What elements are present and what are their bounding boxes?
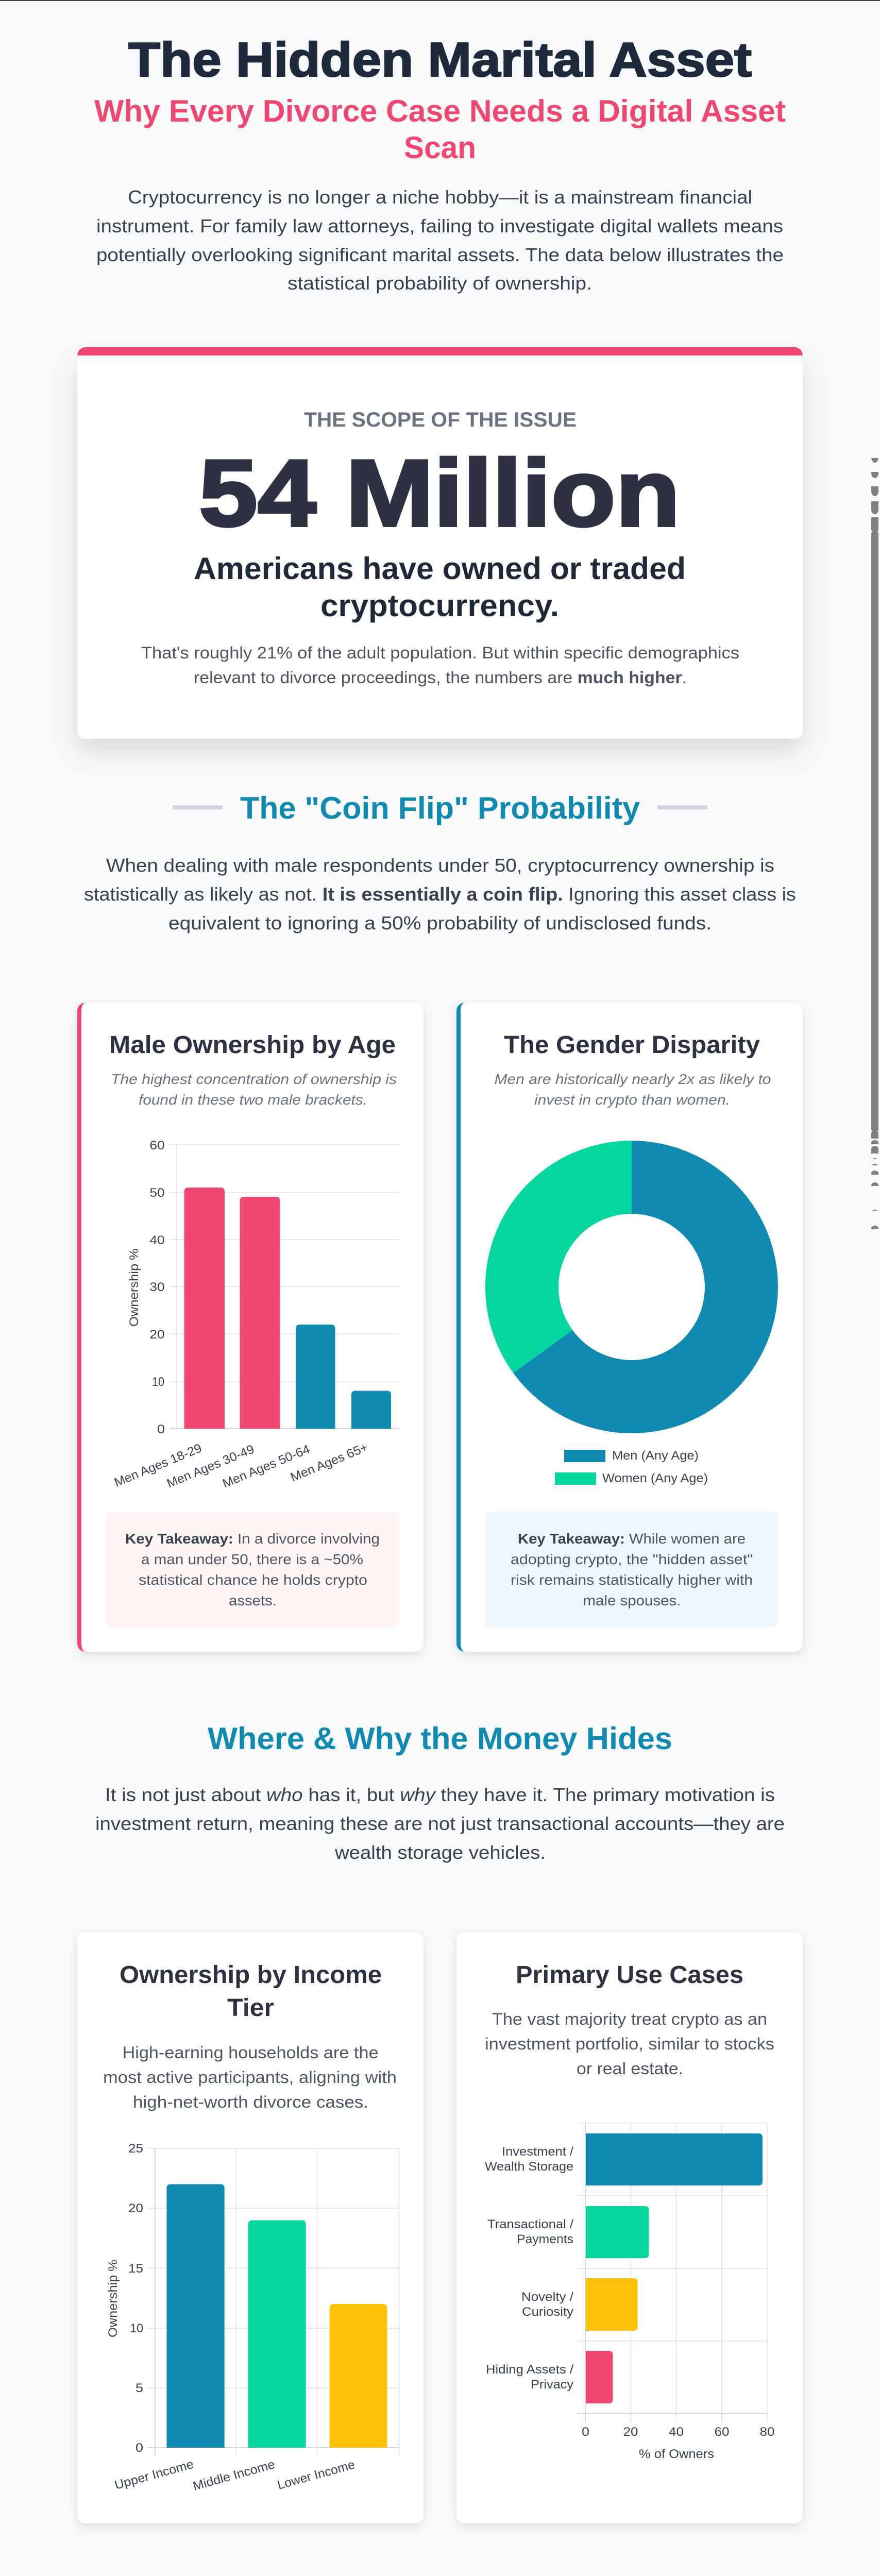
panel: gender disparity xyxy=(456,1003,803,1652)
coin flip paragraph: equivalent to ignoring a 50% probability of undisclosed funds. xyxy=(168,912,712,934)
panel: income tier xyxy=(77,1932,424,2523)
bar chart: male ownership: 60 xyxy=(149,1139,165,1153)
coin flip paragraph: When dealing with male respondents under 50, cryptocurrency ownership is xyxy=(106,855,774,876)
bar chart: use cases: Hiding Assets / xyxy=(486,2363,573,2377)
subtext xyxy=(495,1071,771,1108)
subtitle: Scan xyxy=(404,130,476,165)
subtitle xyxy=(94,94,786,165)
big number caption: cryptocurrency. xyxy=(320,588,559,623)
bar chart: male ownership: 0 xyxy=(157,1422,165,1436)
bar chart: use cases: Curiosity xyxy=(522,2305,573,2319)
description: High-earning households are the xyxy=(123,2043,378,2062)
subtext: The highest concentration of ownership is xyxy=(111,1071,397,1087)
callout: key takeaway xyxy=(485,1512,778,1627)
bar chart: income: Ownership % xyxy=(106,2260,120,2337)
big number: 54 Million xyxy=(199,440,680,546)
scope note: That's roughly 21% of the adult population. But within specific demographics xyxy=(141,643,739,662)
intro paragraph: statistical probability of ownership. xyxy=(287,273,592,294)
bar chart: income: Middle Income xyxy=(191,2458,277,2494)
bar chart: income: 15 xyxy=(128,2262,143,2276)
bar chart: use cases: Payments xyxy=(517,2232,573,2246)
where and why paragraph: wealth storage vehicles. xyxy=(334,1842,546,1863)
big number caption: Americans have owned or traded xyxy=(194,551,686,586)
subtext xyxy=(111,1071,397,1108)
bar chart: male ownership: Men Ages 65+ xyxy=(289,1440,370,1485)
intro paragraph xyxy=(96,187,784,294)
bar chart: use cases: 40 xyxy=(669,2425,684,2439)
where and why paragraph xyxy=(95,1784,785,1863)
donut chart xyxy=(485,1141,778,1433)
bar chart: male ownership: 50 xyxy=(149,1186,165,1200)
description xyxy=(103,2043,397,2111)
callout: key takeaway: Key Takeaway: While women are xyxy=(518,1531,746,1547)
panel: scope of the issue xyxy=(77,347,803,739)
bar chart: use cases: Novelty / xyxy=(521,2290,573,2304)
bar chart: male ownership: Ownership % xyxy=(127,1248,141,1327)
heading: Ownership by Income xyxy=(120,1961,382,1989)
legend: Men (Any Age) xyxy=(612,1449,699,1463)
subtext: invest in crypto than women. xyxy=(534,1092,730,1108)
bar chart: male ownership: 20 xyxy=(149,1328,165,1342)
bar chart: income: Upper Income xyxy=(113,2458,195,2493)
bar chart: use cases: Wealth Storage xyxy=(485,2160,573,2174)
title: The Hidden Marital Asset xyxy=(128,32,752,87)
callout: key takeaway: a man under 50, there is a ~50% xyxy=(141,1551,363,1567)
scope note: relevant to divorce proceedings, the numbers are much higher . xyxy=(194,668,687,687)
panel: primary use cases xyxy=(456,1932,803,2523)
intro paragraph: Cryptocurrency is no longer a niche hobby—it is a mainstream financial xyxy=(128,187,752,208)
scope note xyxy=(141,643,739,687)
callout: key takeaway: risk remains statistically higher with xyxy=(511,1572,753,1588)
bar chart: income: Lower Income xyxy=(276,2458,357,2493)
callout: key takeaway: statistical chance he holds crypto xyxy=(139,1572,367,1588)
bar chart: male ownership: Men Ages 50-64 xyxy=(221,1442,312,1491)
legend xyxy=(555,1449,708,1485)
bar chart: use cases: 60 xyxy=(714,2425,730,2439)
bar chart: male ownership: 30 xyxy=(149,1280,165,1294)
bar chart: male ownership: 10 xyxy=(152,1375,164,1389)
bar chart: use cases: 80 xyxy=(759,2425,775,2439)
bar chart: use cases xyxy=(485,2123,775,2461)
intro paragraph: instrument. For family law attorneys, failing to investigate digital wallets means xyxy=(96,215,783,236)
callout: key takeaway: male spouses. xyxy=(583,1592,681,1608)
bar chart: male ownership: 40 xyxy=(149,1233,165,1247)
scope label: THE SCOPE OF THE ISSUE xyxy=(304,409,577,431)
callout: key takeaway: assets. xyxy=(229,1592,277,1608)
bar chart: male ownership: Men Ages 30-49 xyxy=(165,1442,257,1491)
description: investment portfolio, similar to stocks xyxy=(485,2035,774,2053)
bar chart: male ownership: Men Ages 18-29 xyxy=(112,1441,204,1490)
bar chart: use cases: 0 xyxy=(582,2425,589,2439)
coin flip paragraph: statistically as likely as not. It is essentially a coin flip. Ignoring this asset class is xyxy=(84,884,796,905)
where and why paragraph: investment return, meaning these are not just transactional accounts—they are xyxy=(95,1813,785,1834)
heading: coin flip: The "Coin Flip" Probability xyxy=(240,791,640,825)
bar chart: income: 10 xyxy=(130,2321,143,2335)
callout: key takeaway: adopting crypto, the "hidden asset" xyxy=(511,1551,753,1567)
heading: Tier xyxy=(227,1994,274,2022)
bar chart: use cases: Privacy xyxy=(531,2378,573,2392)
description xyxy=(485,2010,774,2078)
bar chart: income: 20 xyxy=(128,2201,143,2215)
bar chart: income: 5 xyxy=(136,2381,143,2395)
intro paragraph: potentially overlooking significant marital assets. The data below illustrates the xyxy=(96,244,784,265)
bar chart: use cases: 20 xyxy=(623,2425,638,2439)
big number caption xyxy=(194,551,686,623)
subtext: found in these two male brackets. xyxy=(139,1092,367,1108)
bar chart: income: 25 xyxy=(128,2142,143,2156)
bar chart: use cases: % of Owners xyxy=(639,2447,714,2461)
bar chart: income xyxy=(106,2142,399,2494)
bar chart: use cases: Transactional / xyxy=(487,2217,573,2231)
subtext: Men are historically nearly 2x as likely to xyxy=(495,1071,771,1087)
callout: key takeaway: Key Takeaway: In a divorce involving xyxy=(125,1531,380,1547)
heading: where and why: Where & Why the Money Hides xyxy=(208,1721,672,1756)
description: The vast majority treat crypto as an xyxy=(492,2010,767,2028)
scrollbar artifact xyxy=(871,458,878,1229)
legend: Women (Any Age) xyxy=(602,1471,708,1485)
panel: male ownership by age xyxy=(77,1003,424,1652)
callout: key takeaway xyxy=(106,1512,399,1627)
bar chart: use cases: Investment / xyxy=(502,2145,573,2159)
heading xyxy=(120,1961,382,2022)
heading: Primary Use Cases xyxy=(516,1961,743,1989)
description: or real estate. xyxy=(577,2059,683,2078)
description: high-net-worth divorce cases. xyxy=(133,2093,368,2111)
subtitle: Why Every Divorce Case Needs a Digital Asset xyxy=(94,94,786,128)
bar chart: income: 0 xyxy=(136,2441,143,2455)
bar chart: male ownership xyxy=(112,1139,399,1491)
where and why paragraph: It is not just about who has it, but why they have it. The primary motivation is xyxy=(105,1784,775,1805)
description: most active participants, aligning with xyxy=(103,2068,397,2087)
heading: Male Ownership by Age xyxy=(109,1031,396,1059)
coin flip paragraph xyxy=(84,855,796,934)
heading: The Gender Disparity xyxy=(504,1031,760,1059)
